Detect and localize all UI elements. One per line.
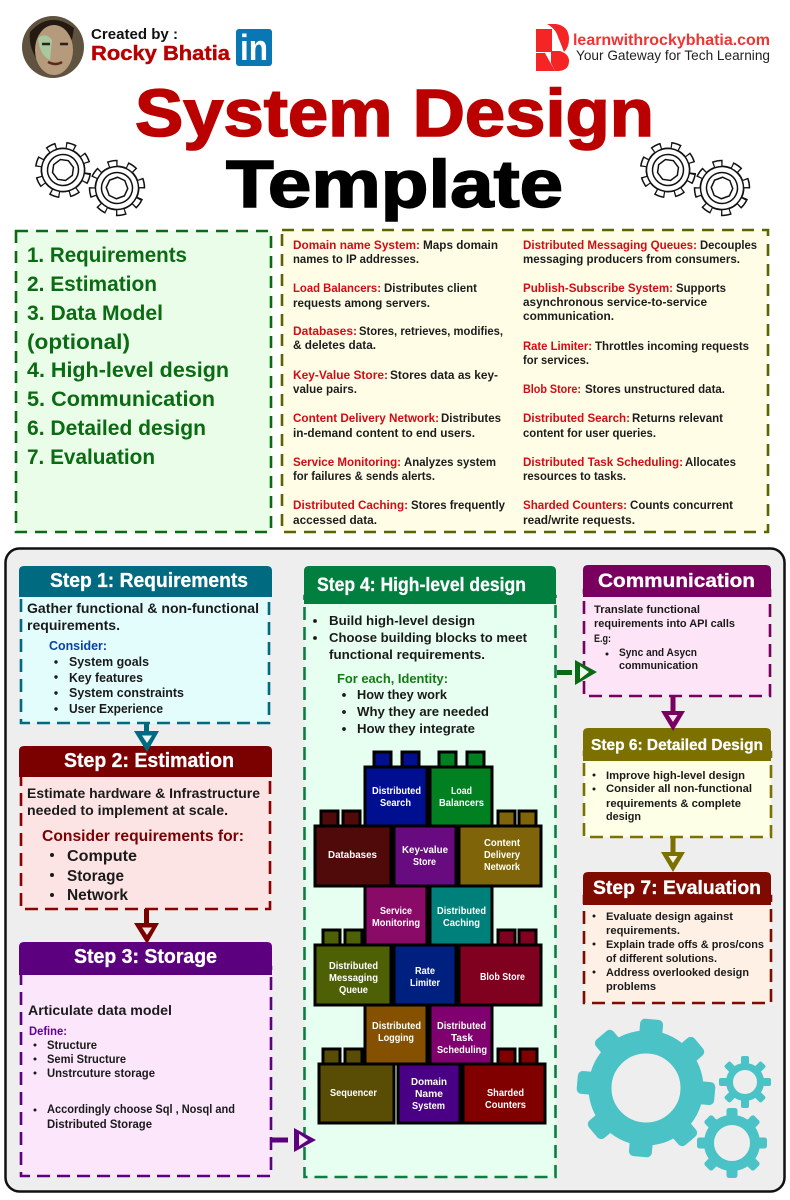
panel: step 7 evaluation: Explain trade offs & pros/cons [606,939,764,951]
panel: step 4 high-level design: Why they are needed [357,704,489,719]
panel: step 7 evaluation: Step 7: Evaluation [593,878,761,899]
panel: building blocks glossary: Distributed Caching: [293,498,408,512]
arrow: step 2 to step 3 [134,909,159,944]
panel: building blocks glossary: read/write requests. [523,513,635,527]
panel: building blocks glossary: Databases: [293,324,357,338]
panel: step 1 requirements [19,566,272,723]
large gear [576,1018,716,1158]
panel: building blocks glossary: Throttles incoming requests [595,339,749,353]
block: sharded counters: Counters [485,1099,526,1111]
block: rate limiter [394,945,456,1005]
panel: step 7 evaluation: Address overlooked design [606,967,749,979]
panel: seven steps list: 1. Requirements [27,244,187,267]
panel: building blocks glossary: Distributed Task Scheduling: [523,455,683,469]
panel: building blocks glossary: Key-Value Store: [293,368,388,382]
panel: step 3 storage [19,942,272,1176]
panel: step 3 storage: Define: [29,1026,67,1038]
author credit [91,27,231,65]
panel: seven steps list: 7. Evaluation [27,446,155,469]
panel: building blocks glossary: Counts concurrent [630,498,733,512]
block: distributed messaging queue: Messaging [329,972,378,984]
panel: step 2 estimation: needed to implement at scale. [27,802,228,818]
panel: step 3 storage: Distributed Storage [47,1119,152,1131]
block: key-value store [394,826,456,886]
block: domain name system: System [412,1100,445,1112]
panel: step 4 high-level design: Step 4: High-level design [317,575,526,596]
block: distributed task scheduling: Task [451,1032,473,1044]
panel: building blocks glossary: value pairs. [293,382,357,396]
block: distributed logging: Distributed [372,1020,421,1032]
panel: communication [583,565,771,696]
block: domain name system [398,1064,460,1123]
website tagline [573,32,770,63]
icon: linkedin: in [240,27,268,68]
panel: building blocks glossary: Stores frequently [411,498,505,512]
block: distributed search: Search [380,797,411,809]
block: distributed caching: Distributed [437,905,486,917]
block: blob store [459,945,541,1005]
panel: step 6 detailed design: Consider all non-functional [606,783,752,795]
panel: step 2 estimation [19,746,272,909]
panel: step 1 requirements: Gather functional & non-functional [27,600,259,616]
block: distributed task scheduling [430,1005,492,1064]
panel: building blocks glossary: Publish-Subscribe System: [523,281,673,295]
block: distributed search: Distributed [372,785,421,797]
panel: building blocks glossary: communication. [523,309,614,323]
arrow: step 4 to communication [557,660,597,685]
panel: seven steps list [16,231,271,532]
panel: step 1 requirements: System constraints [69,686,184,700]
author portrait [22,16,84,78]
panel: building blocks glossary: Analyzes system [404,455,496,469]
panel: step 1 requirements: Key features [69,671,143,685]
panel: building blocks glossary: Distributed Messaging Queues: [523,238,697,252]
panel: step 7 evaluation [583,872,771,1003]
block: distributed logging: Logging [378,1032,414,1044]
block: distributed messaging queue [315,945,391,1005]
panel: communication: Communication [598,571,755,592]
panel: step 6 detailed design: design [606,811,641,823]
panel: step 6 detailed design [583,728,771,837]
building blocks stack [315,752,545,1123]
panel: building blocks glossary: Stores data as key- [390,368,498,382]
panel: step 4 high-level design: Choose building blocks to meet [329,630,528,645]
block: databases [315,826,391,886]
panel: seven steps list: 5. Communication [27,388,215,411]
panel: building blocks glossary: Blob Store: [523,382,581,396]
block: content delivery network [459,826,541,886]
website tagline: Your Gateway for Tech Learning [576,47,770,63]
panel: step 2 estimation: Estimate hardware & Infrastructure [27,785,260,801]
icon: gears left [35,142,150,221]
panel: seven steps list: 3. Data Model [27,302,163,325]
block: sharded counters [463,1064,545,1123]
panel: step 3 storage: Accordingly choose Sql , Nosql and [47,1104,235,1116]
panel: step 2 estimation: Step 2: Estimation [64,750,234,772]
title: Template [226,147,563,222]
panel: building blocks glossary: content for user queries. [523,426,656,440]
panel: step 1 requirements: Step 1: Requirements [50,570,248,592]
block: distributed messaging queue: Distributed [329,960,378,972]
panel: building blocks glossary: Distributed Search: [523,411,630,425]
panel: building blocks glossary: Domain name System: [293,238,420,252]
panel: building blocks glossary: Supports [676,281,726,295]
panel: building blocks glossary: Distributes client [384,281,477,295]
panel: building blocks glossary: & deletes data. [293,338,376,352]
panel: step 7 evaluation: requirements. [606,925,680,937]
arrow: step 6 to step 7 [661,837,685,872]
block: distributed caching [430,886,492,945]
website tagline: learnwithrockybhatia.com [573,32,770,49]
block: databases: Databases [328,849,377,861]
panel: building blocks glossary: Decouples [700,238,757,252]
panel: step 2 estimation: Storage [67,868,124,885]
panel: building blocks glossary: names to IP addresses. [293,252,419,266]
icon: gears right [640,142,755,221]
panel: step 6 detailed design: Improve high-level design [606,770,745,782]
arrow: communication to step 6 [661,696,685,731]
block: distributed messaging queue: Queue [339,984,368,996]
panel: communication: Sync and Asycn [619,647,697,659]
block: service monitoring: Service [380,905,412,917]
panel: building blocks glossary: resources to tasks. [523,469,626,483]
panel: communication: communication [619,660,698,672]
panel: step 3 storage: Unstrcuture storage [47,1068,155,1080]
block: distributed search [365,767,427,826]
block: distributed task scheduling: Distributed [437,1020,486,1032]
arrow: step 3 to step 4 [271,1128,316,1152]
author credit: Created by : [91,27,178,43]
panel: seven steps list: 6. Detailed design [27,417,206,440]
panel: step 3 storage: Structure [47,1040,97,1052]
icon: teal gears [576,1018,771,1178]
panel: building blocks glossary: Distributes [441,411,501,425]
panel: step 2 estimation: Consider requirements for: [42,828,244,845]
panel: building blocks glossary: Stores, retrieves, modifies, [359,324,503,338]
panel: communication: Translate functional [594,604,700,616]
panel: step 4 high-level design [304,566,556,1177]
arrow: step 1 to step 2 [134,723,159,752]
panel: building blocks glossary: messaging producers from consumers. [523,252,740,266]
panel: building blocks glossary: accessed data. [293,513,377,527]
panel: step 1 requirements: User Experience [69,702,163,716]
panel: step 7 evaluation: problems [606,981,656,993]
panel: seven steps list: (optional) [27,331,130,354]
small upper gear [719,1056,771,1108]
panel: building blocks glossary: requests among servers. [293,296,430,310]
block: content delivery network: Delivery [484,849,520,861]
block: content delivery network: Content [484,837,520,849]
panel: step 3 storage: Step 3: Storage [74,946,217,968]
panel: building blocks glossary: in-demand content to end users. [293,426,475,440]
panel: step 6 detailed design: requirements & complete [606,798,741,810]
block: distributed logging [365,1005,427,1064]
block: sequencer [319,1064,394,1123]
block: domain name system: Name [415,1088,443,1100]
block studs [321,752,537,1064]
panel: seven steps list: 4. High-level design [27,359,229,382]
medium lower gear [697,1108,767,1178]
block: sequencer: Sequencer [330,1087,377,1099]
panel: step 4 high-level design: Build high-level design [329,613,475,628]
panel: building blocks glossary: Allocates [685,455,736,469]
block: key-value store: Key-value [402,844,448,856]
panel: step 1 requirements: requirements. [27,617,120,633]
panel: step 7 evaluation: Evaluate design against [606,911,733,923]
panel: building blocks glossary: for services. [523,353,589,367]
panel: step 2 estimation: Network [67,887,128,904]
panel: step 3 storage: Semi Structure [47,1054,126,1066]
block: distributed task scheduling: Scheduling [437,1044,487,1056]
panel: seven steps list: 2. Estimation [27,273,157,296]
panel: step 1 requirements: Consider: [49,639,107,653]
block: rate limiter: Limiter [410,977,440,989]
panel: step 6 detailed design: Step 6: Detailed Design [591,737,763,754]
panel: step 4 high-level design: How they integrate [357,721,475,736]
panel: step 3 storage: Articulate data model [28,1002,172,1018]
panel: step 4 high-level design: functional requirements. [329,647,485,662]
panel: communication: E.g: [594,633,611,645]
block: blob store: Blob Store [480,971,525,983]
panel: building blocks glossary: Rate Limiter: [523,339,592,353]
panel: building blocks glossary: Load Balancers: [293,281,381,295]
logo: R mark [536,24,569,71]
panel: step 7 evaluation: of different solutions. [606,953,717,965]
block: load balancers: Balancers [439,797,484,809]
block: load balancers [430,767,492,826]
block: content delivery network: Network [484,861,520,873]
block: key-value store: Store [413,856,436,868]
panel: step 2 estimation: Compute [67,848,137,865]
panel: process flow background [6,548,784,1192]
block: rate limiter: Rate [415,965,435,977]
title [135,76,654,222]
panel: communication: requirements into API calls [594,618,735,630]
panel: building blocks glossary: Sharded Counters: [523,498,627,512]
panel: step 4 high-level design: For each, Identity: [337,671,448,686]
block: service monitoring: Monitoring [372,917,420,929]
block: domain name system: Domain [411,1076,447,1088]
panel: building blocks glossary: for failures & sends alerts. [293,469,435,483]
panel: building blocks glossary: Maps domain [423,238,498,252]
block: sharded counters: Sharded [487,1087,524,1099]
panel: step 4 high-level design: How they work [357,687,448,702]
title: System Design [135,76,654,151]
panel: building blocks glossary: Content Delivery Network: [293,411,439,425]
panel: building blocks glossary: Returns relevant [632,411,723,425]
panel: building blocks glossary: Service Monitoring: [293,455,401,469]
author credit: Rocky Bhatia [91,43,231,65]
block: service monitoring [365,886,427,945]
panel: building blocks glossary: Stores unstructured data. [585,382,725,396]
panel: building blocks glossary [282,230,768,532]
panel: building blocks glossary: asynchronous service-to-service [523,295,707,309]
panel: step 1 requirements: System goals [69,655,149,669]
block: distributed caching: Caching [443,917,480,929]
block: load balancers: Load [451,785,472,797]
